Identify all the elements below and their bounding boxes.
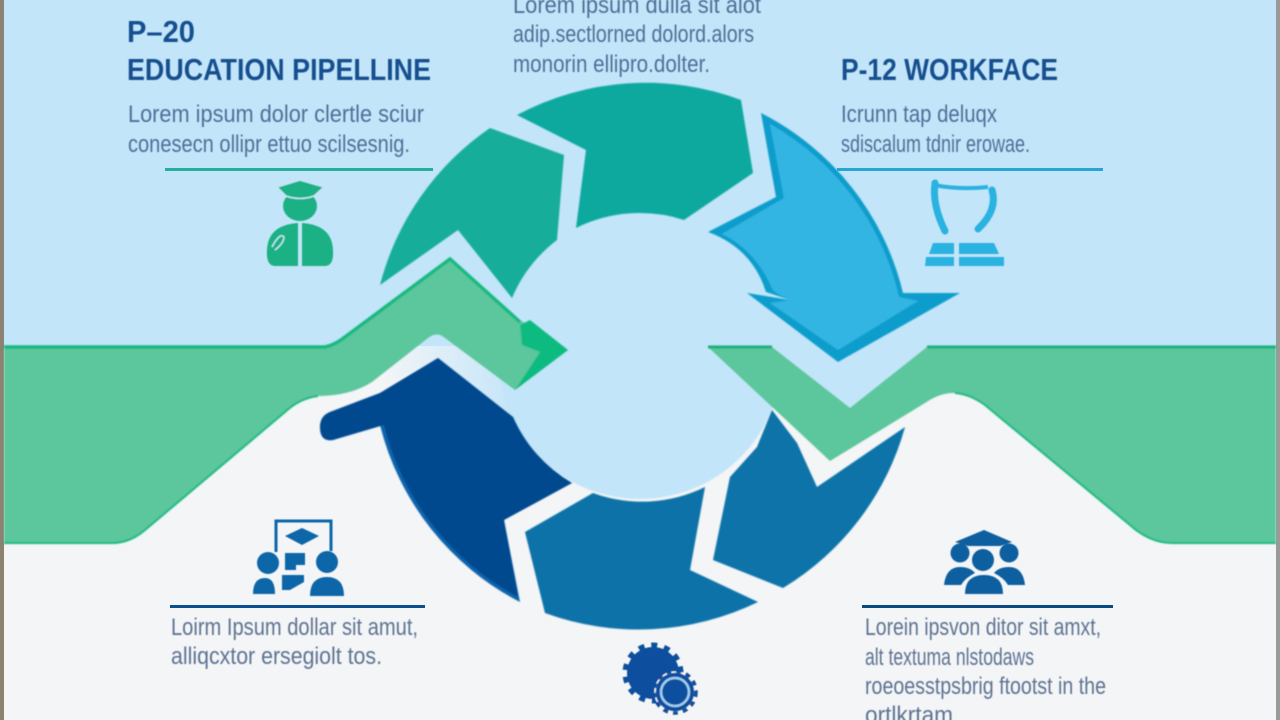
arrow: mid blue bottom [525,487,758,630]
text block: lower right: alt textuma nlstodaws [865,644,1034,671]
panel: P-20 education pipeline [127,14,433,266]
cycle arrows [320,83,960,630]
panel: P-12 workforce [837,52,1103,266]
text block: P-20 description: Lorem ipsum dolor clertle sciur [128,101,424,128]
panel: top centre text: monorin ellipro.dolter. [513,51,710,78]
arrow: teal top [517,83,753,228]
icon: group of people [944,530,1025,594]
arrow: sky blue right [708,113,960,362]
panel: top centre text: adip.sectlorned dolord.alors [513,21,754,48]
text block: lower right: Lorein ipsvon ditor sit amxt, [865,614,1101,641]
text block: P-12 description [841,101,1030,158]
text block: lower left: alliqcxtor ersegiolt tos. [171,643,382,670]
panel: lower left [170,521,425,670]
centre circle [498,215,782,499]
text block: P-12 description: Icrunn tap deluqx [841,101,997,128]
heading: P-20 [127,14,431,87]
text block: lower left [171,614,418,670]
panel: lower right [862,530,1113,720]
text block: lower right [865,614,1106,720]
text block: P-12 description: sdiscalum tdnir erowae. [841,131,1030,158]
icon: graduate [267,180,333,266]
text block: lower left: Loirm Ipsum dollar sit amut, [171,614,418,641]
arrow: teal left [380,128,564,298]
text block: P-20 description [128,101,424,158]
heading: P-20: P–20 [127,14,195,49]
text block: P-20 description: conesecn ollipr ettuo scilsesnig. [128,131,410,158]
heading: P-20: EDUCATION PIPELLINE [127,52,431,87]
heading: P-12 workface: P-12 WORKFACE [841,52,1058,87]
icon: workforce [925,183,1004,266]
arrow: navy left [320,358,572,602]
green band: right [708,347,1276,543]
panel: top centre text [513,0,761,78]
arrow: mid blue right [713,410,905,588]
green band: left [4,258,568,543]
icon: gears [625,645,696,713]
text block: lower right: roeoesstpsbrig ftootst in the [865,673,1106,700]
icon: classroom board [253,521,344,596]
